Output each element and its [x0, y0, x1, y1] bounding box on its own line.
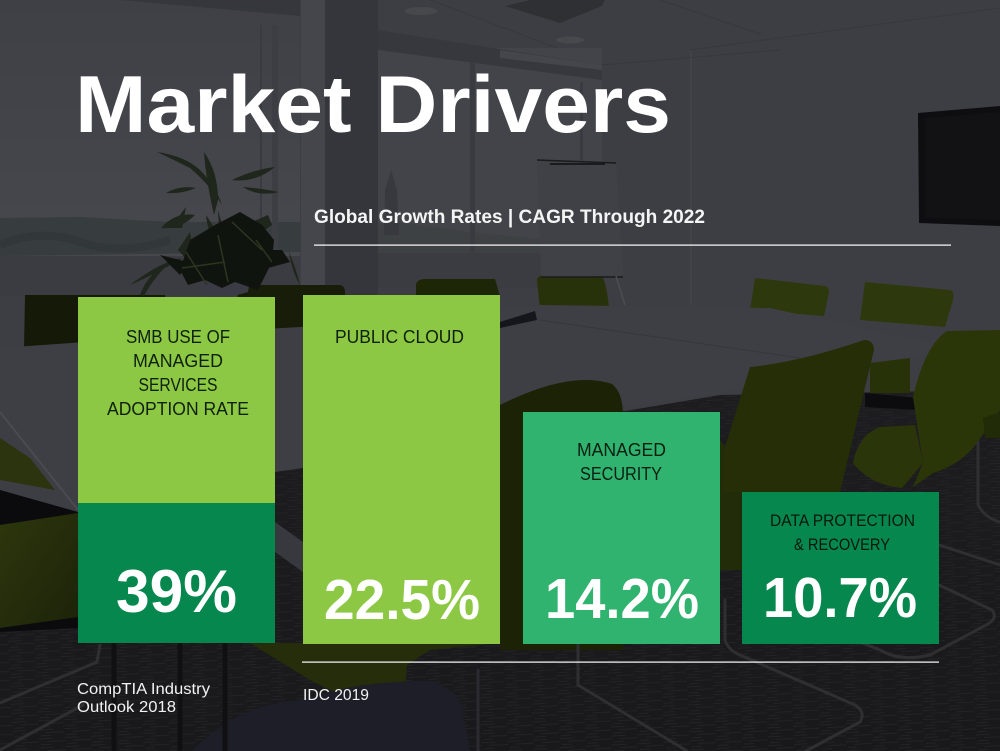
label: SMB use of managed services adoption rate: ADOPTION RATE [107, 399, 249, 419]
subtitle: Global Growth Rates | CAGR Through 2022 [314, 207, 705, 228]
flip chart [537, 160, 625, 305]
window left [0, 0, 300, 296]
label: managed security: MANAGED [577, 440, 666, 460]
divider: bottom [302, 662, 939, 663]
centre back [722, 340, 874, 492]
value: 39%: 39% [116, 558, 237, 625]
source: CompTIA [77, 681, 210, 716]
label: data protection and recovery [770, 512, 915, 554]
value: 14.2%: 14.2% [545, 567, 699, 631]
label: SMB use of managed services adoption rate: MANAGED [133, 351, 223, 371]
title: Market Drivers [75, 60, 671, 150]
label: SMB use of managed services adoption rate [107, 327, 249, 419]
far seat [870, 358, 910, 393]
right seat [853, 425, 923, 488]
value: 22.5%: 22.5% [324, 568, 480, 632]
source: CompTIA: CompTIA Industry [77, 681, 210, 698]
label: data protection and recovery: & RECOVERY [794, 536, 890, 554]
panel: SMB use of managed services [78, 297, 275, 643]
dark chair behind managed security [500, 380, 623, 650]
label: data protection and recovery: DATA PROTECTION [770, 512, 915, 530]
source: CompTIA: Outlook 2018 [77, 699, 176, 716]
back chairs [24, 275, 954, 348]
TV [918, 106, 1000, 226]
ceiling [405, 0, 1000, 65]
chair legs [0, 442, 1000, 751]
left chair under table [0, 490, 78, 632]
seat right of managed security [720, 440, 742, 570]
arm [865, 393, 917, 410]
seat under public cloud [250, 643, 500, 695]
label: SMB use of managed services adoption rate: SMB USE OF [126, 327, 230, 347]
panel: data protection and recovery [742, 492, 939, 644]
divider: top [314, 244, 951, 246]
right back [913, 330, 1000, 487]
column [301, 0, 378, 296]
label: public cloud: PUBLIC CLOUD [335, 327, 464, 347]
label: SMB use of managed services adoption rate: SERVICES [138, 375, 218, 395]
floor [0, 390, 1000, 751]
table [0, 305, 960, 572]
chair pedestal [192, 681, 470, 751]
value: 10.7%: 10.7% [763, 566, 917, 630]
label: managed security: SECURITY [580, 464, 662, 484]
front chairs [0, 330, 1000, 695]
wall seam [690, 50, 692, 305]
plant [130, 152, 300, 297]
window centre with distant tower [378, 30, 602, 288]
source: IDC: IDC 2019 [303, 687, 369, 704]
panel: public cloud [303, 295, 500, 644]
panel: managed security [523, 412, 720, 644]
label: managed security [577, 440, 666, 484]
